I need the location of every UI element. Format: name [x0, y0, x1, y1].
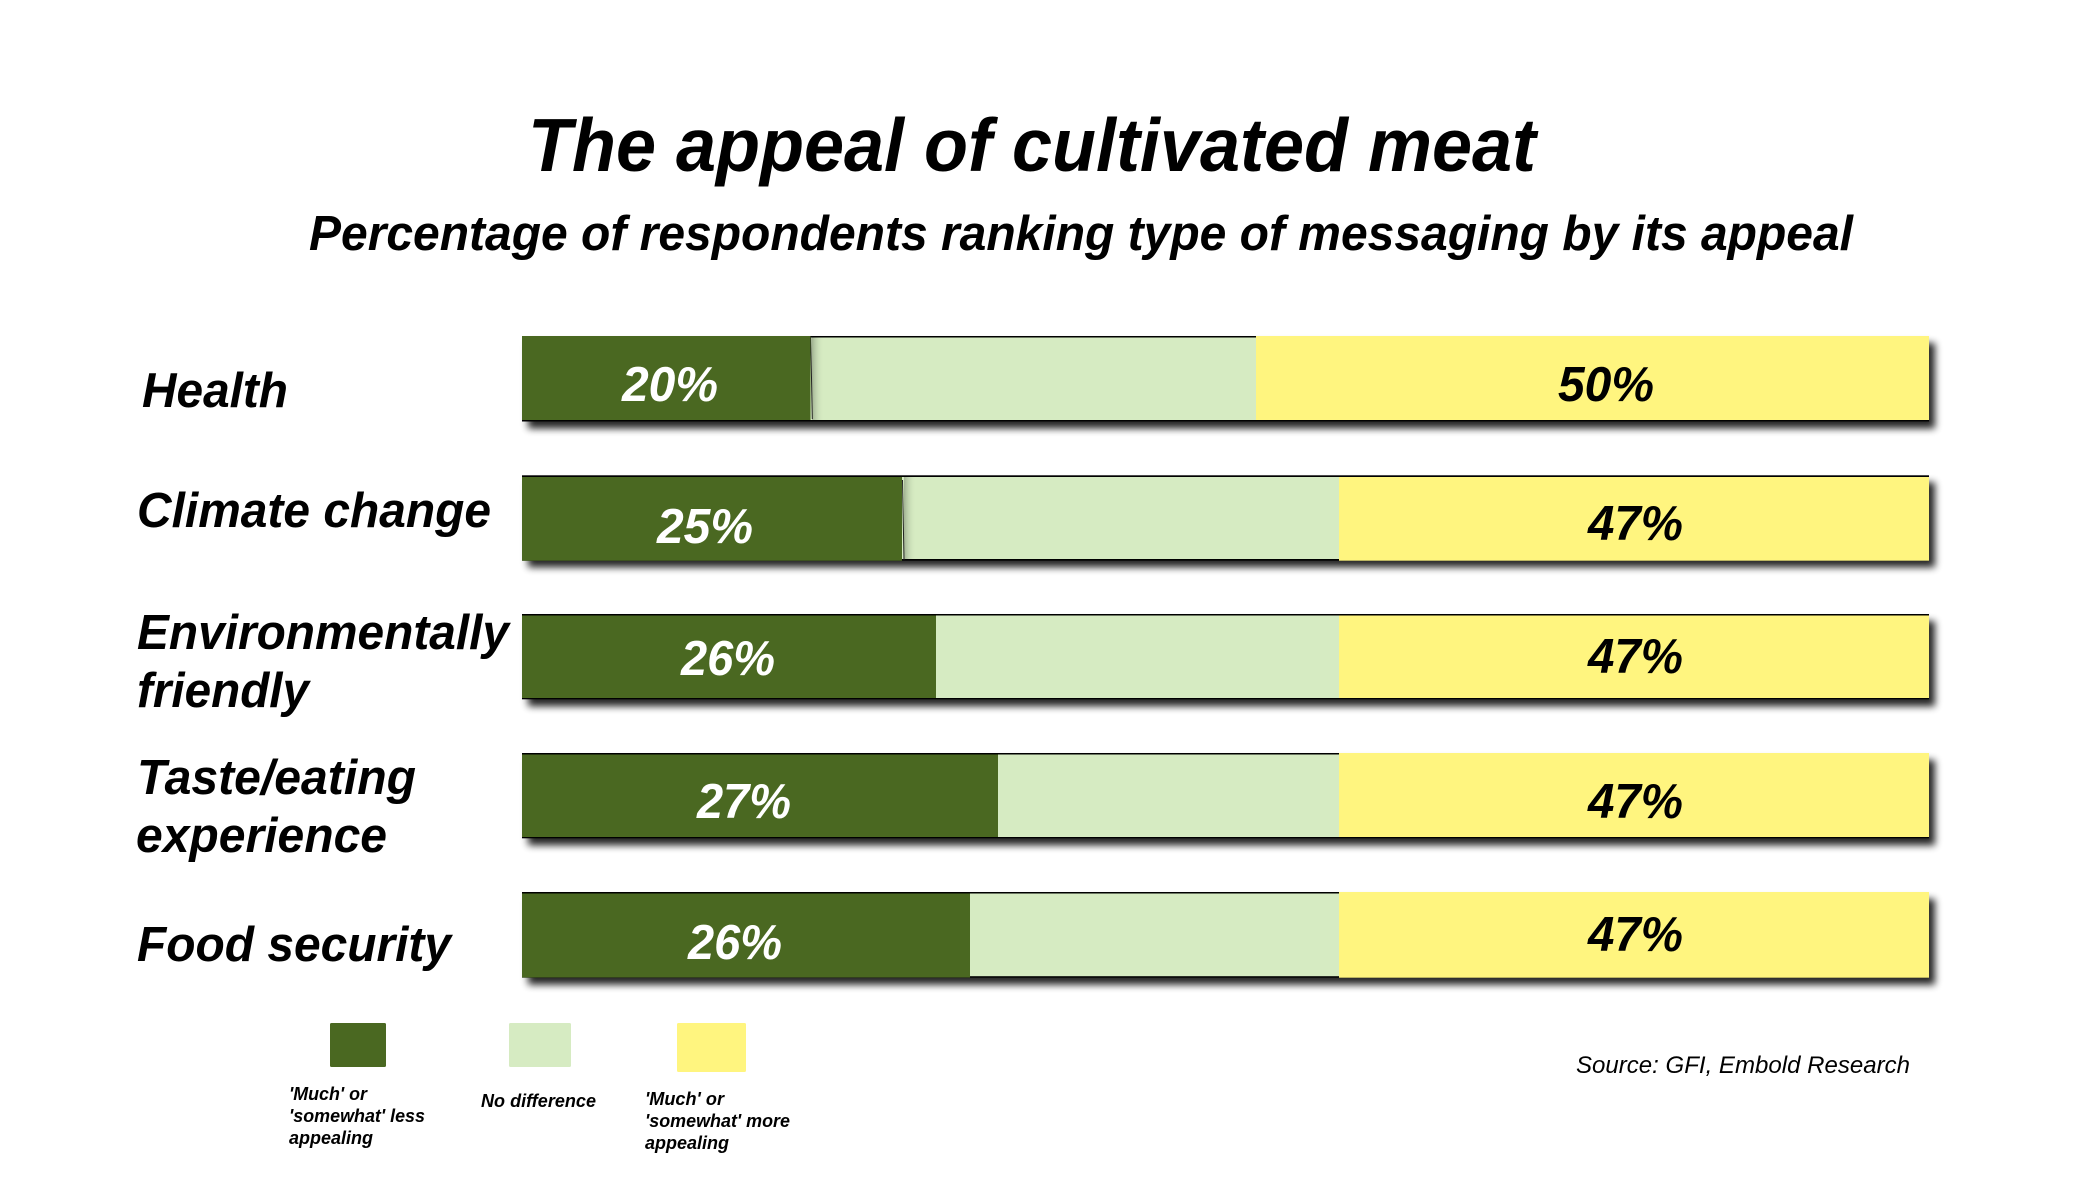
segment: less appealing 26% — [522, 894, 970, 978]
row: Health — [142, 336, 1935, 428]
title: The appeal of cultivated meat — [528, 103, 1539, 187]
legend label: more appealing: 'somewhat' more — [645, 1110, 790, 1131]
legend label: no difference: No difference — [481, 1090, 596, 1111]
segment: less appealing 26% — [522, 616, 936, 698]
segment: more appealing — [1339, 892, 1929, 978]
label: Health: Health — [142, 364, 288, 418]
row: Climate change — [137, 475, 1935, 567]
label: Taste/eating experience — [136, 751, 416, 863]
legend label: less appealing: appealing — [289, 1127, 373, 1148]
label: Environmentally friendly — [137, 606, 512, 718]
label: Food security: Food security — [137, 918, 454, 972]
label: Taste/eating experience: experience — [136, 809, 387, 863]
value: 26%: 26% — [680, 632, 775, 686]
segment: more appealing — [1339, 477, 1929, 561]
legend — [289, 1023, 790, 1153]
row: Taste/eating experience — [136, 751, 1935, 863]
legend label: less appealing: 'Much' or — [289, 1083, 369, 1104]
label: Environmentally friendly: Environmentally — [137, 606, 512, 660]
label: Taste/eating experience: Taste/eating — [137, 751, 416, 805]
row: Environmentally friendly — [137, 606, 1935, 718]
value: 27%: 27% — [696, 775, 791, 829]
segment: more appealing — [1339, 616, 1929, 698]
subtitle: Percentage of respondents ranking type of messaging by its appeal — [309, 207, 1854, 261]
legend swatch: less appealing — [330, 1023, 386, 1067]
value: 47%: 47% — [1587, 497, 1683, 551]
label: Environmentally friendly: friendly — [137, 664, 312, 718]
segment: more appealing — [1339, 753, 1929, 837]
legend label: more appealing — [645, 1088, 790, 1153]
segment: less appealing 20% — [522, 336, 810, 420]
legend label: less appealing — [289, 1083, 425, 1148]
value: 47%: 47% — [1587, 908, 1683, 962]
segment: more appealing — [1256, 336, 1929, 420]
source note: Source: GFI, Embold Research — [1576, 1052, 1910, 1079]
legend label: more appealing: 'Much' or — [645, 1088, 726, 1109]
value: 20%: 20% — [621, 358, 718, 412]
value: 47%: 47% — [1587, 775, 1683, 829]
value: 50%: 50% — [1558, 358, 1654, 412]
legend swatch: no difference — [509, 1023, 571, 1067]
legend swatch: more appealing — [677, 1023, 746, 1072]
segment: less appealing 27% — [522, 754, 998, 837]
value: 25%: 25% — [656, 500, 753, 554]
value: 26%: 26% — [687, 916, 782, 970]
segment: less appealing 25% — [522, 477, 902, 561]
label: Climate change: Climate change — [137, 484, 491, 538]
value: 47%: 47% — [1587, 630, 1683, 684]
row: Food security — [137, 892, 1935, 985]
legend label: more appealing: appealing — [645, 1132, 729, 1153]
legend label: less appealing: 'somewhat' less — [289, 1105, 425, 1126]
